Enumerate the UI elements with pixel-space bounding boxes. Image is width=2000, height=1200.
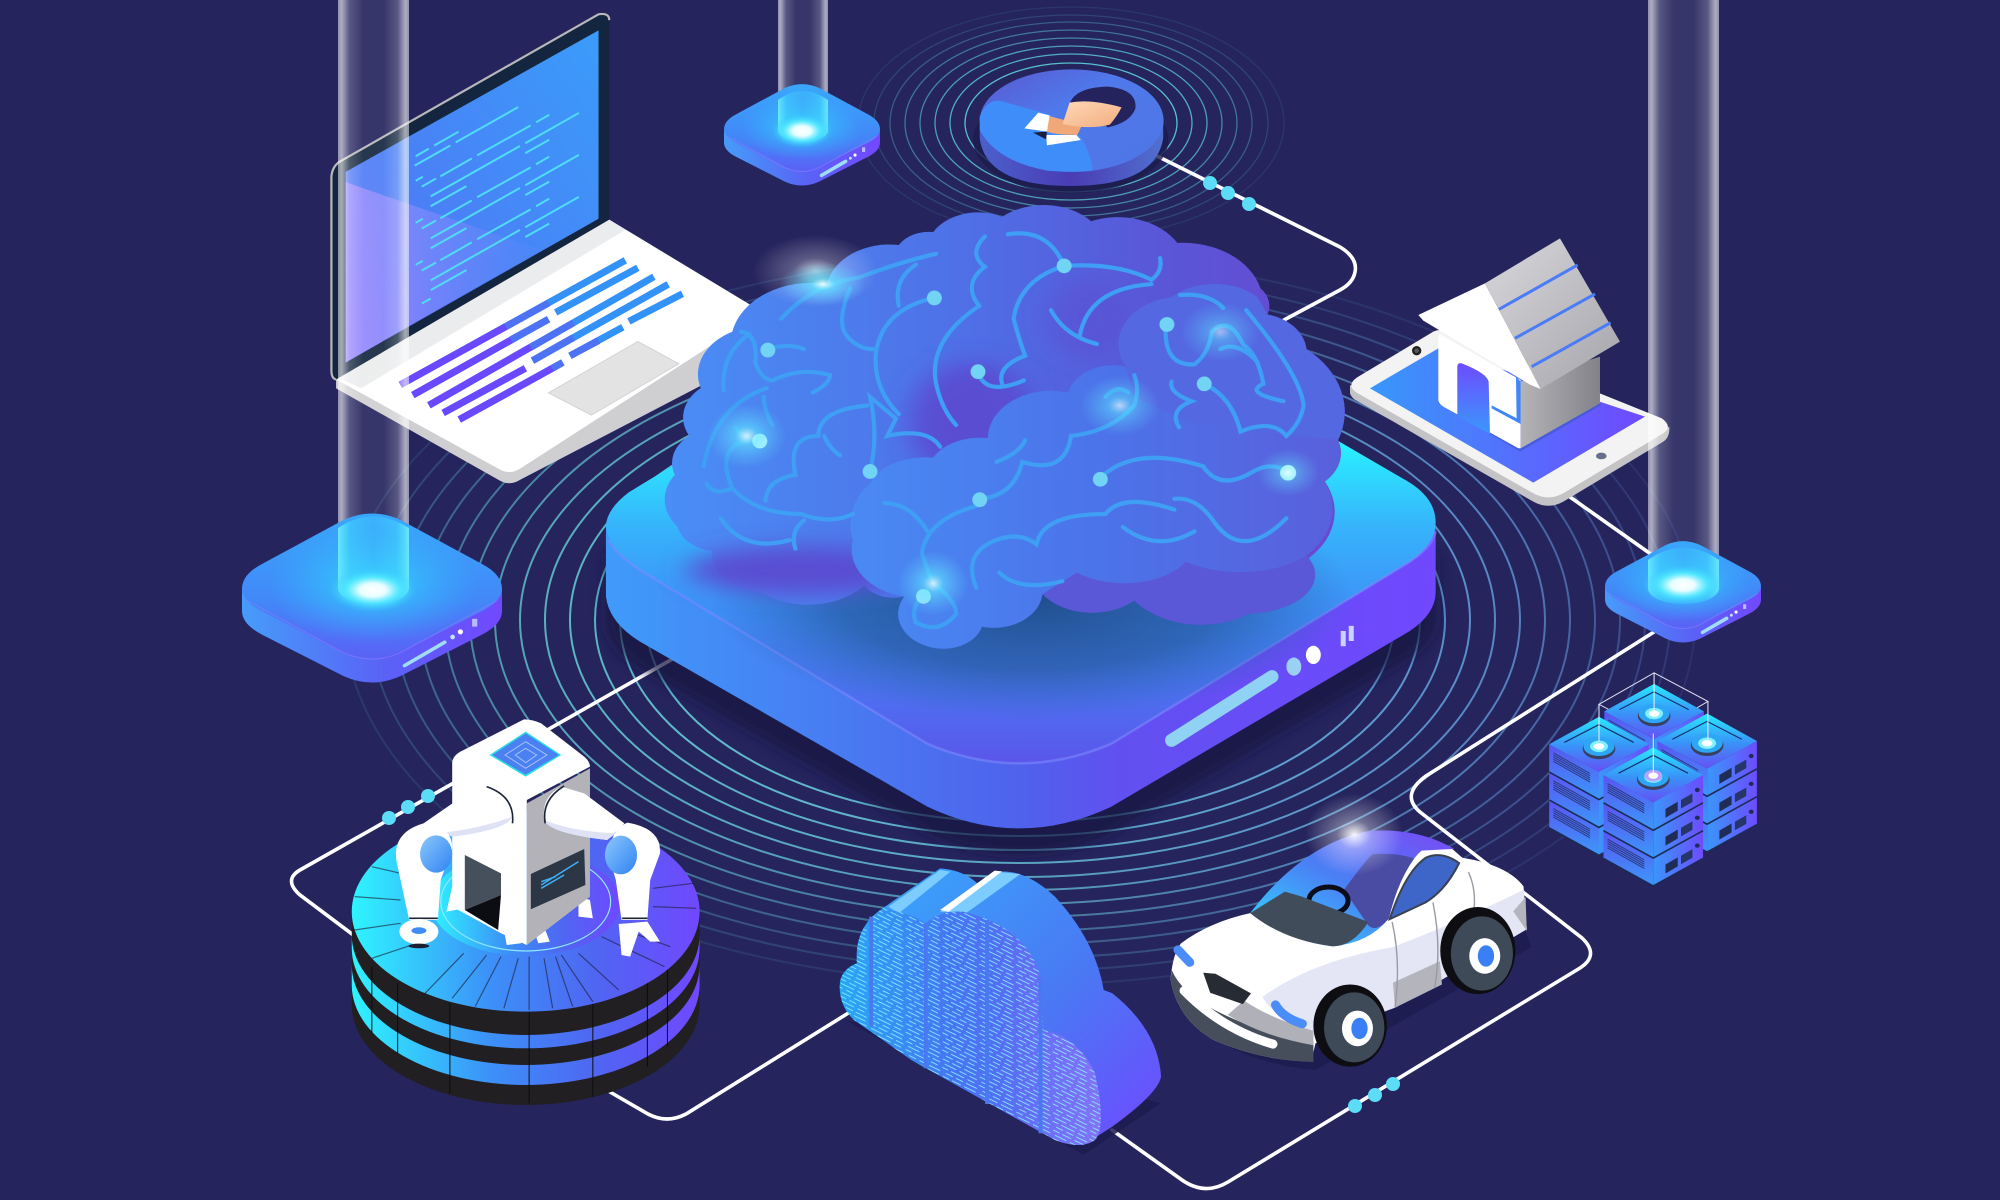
cloud front [840,908,1101,1145]
keyboard mid transition [506,303,599,368]
connector lines [292,154,1655,1189]
cloud shadow [845,1020,1161,1155]
robot on cylinder [352,719,700,1105]
connector dots [382,176,1400,1113]
left server stack [1549,717,1649,855]
car bumper chrome [1228,1001,1313,1045]
cloud lavender tint [926,911,1101,1145]
house right wall [1521,357,1600,448]
car sill [1393,897,1527,1008]
brain [665,205,1345,649]
car lower dark trim [1171,970,1313,1062]
rear wheel [1440,907,1515,994]
house shadow [1438,390,1602,452]
cloud column gaps [871,917,1041,1133]
person portrait [1024,87,1136,145]
central platform [606,269,1436,854]
trackpad [549,341,679,415]
robot right gripper [619,918,660,957]
person disc [973,69,1168,193]
platform top surface [606,269,1436,763]
steering wheel [1309,887,1348,914]
disc body [980,117,1163,186]
cloud data pattern [840,908,1101,1145]
robot left forearm [396,823,452,920]
status pill [1172,677,1272,740]
status bars [1343,626,1351,646]
brain contact shadow [709,475,1352,718]
cylinder base dark [352,912,700,1105]
cloud top glint [940,871,1002,912]
platform edge highlight [609,531,1436,763]
robot left panel [465,855,501,930]
robot left gripper [399,918,438,948]
headlights [1178,950,1302,1024]
laptop base side [336,312,756,483]
laptop screen [346,30,599,362]
screen code lines [415,107,579,304]
roof stripes [1499,265,1611,367]
cylinder blue stripe 2 [352,935,700,1048]
robot right screen [531,849,585,909]
tablet top [1351,330,1668,497]
car side window [1390,855,1459,919]
wire cube back [1599,673,1708,734]
brain cerebellum tint [1042,553,1315,625]
robot right elbow [605,836,637,874]
roof flare [1305,794,1403,876]
robot legs [446,887,593,945]
front wheel [1313,985,1387,1067]
brain purple shading [686,280,1128,594]
laptop lid frame [331,14,609,379]
laptop keyboard blue [400,260,682,420]
tablet screen [1370,348,1645,483]
brain light flares [706,234,1320,616]
platform side [606,527,1436,828]
car side panel [1262,890,1527,1036]
car grille [1203,973,1251,1004]
car interior [1344,854,1414,928]
laptop base top [336,220,758,472]
back server [1604,684,1704,767]
robot right joint line [545,786,564,823]
tablet home button [1596,453,1607,459]
screen reflection [346,182,541,362]
cloud [840,868,1161,1155]
robot left upper arm [424,787,512,837]
robot right upper arm [544,787,624,840]
tablet camera [1412,346,1421,355]
car shadow [1177,890,1532,1070]
robot left elbow [420,835,452,873]
car glass dome [1250,830,1454,946]
robot left arm shading [444,817,512,837]
beam and small platform top [724,0,880,186]
front server stack [1603,747,1703,886]
robot right forearm [611,823,660,920]
status lights [1286,646,1321,676]
brain folds [704,233,1304,627]
tablet with smart home [1350,238,1669,506]
cylinder blue stripe 1 [352,965,700,1085]
robot left joint line [487,787,513,823]
right server stack [1657,714,1757,852]
house door [1457,363,1490,434]
beam front left [242,0,502,682]
concentric signal rings around central platform [345,255,1695,985]
robot body right [527,768,590,945]
laptop hinge strip [338,220,625,388]
car door lines [1392,872,1474,1008]
platform ground shadow [606,553,1436,854]
brain parietal lobe [1118,284,1345,440]
keyboard purple keys [400,323,556,420]
car light bar [1184,991,1273,1044]
robot chest chip [490,732,561,777]
cloud top highlights [888,870,1020,913]
beam right and platform [1605,0,1761,642]
robot body left [452,719,590,945]
house window [1492,377,1521,424]
cylinder top [352,812,700,1012]
house left wall [1438,333,1521,448]
roof side [1485,238,1620,389]
cylinder seams [372,967,667,1103]
car body [1171,832,1527,1061]
disc top [980,69,1164,172]
center disc ring [441,852,611,951]
concentric signal rings around person disc [858,7,1284,239]
tablet side [1350,385,1669,506]
car [1171,794,1532,1070]
cylinder top radial lines [355,867,696,1010]
laptop [331,14,758,483]
robot right arm shading [544,820,616,840]
cloud extruded body [883,868,1161,1145]
wire cube lines [1599,673,1708,773]
server stacks [1549,673,1757,886]
cylinder center disc [431,851,620,956]
person suit [980,101,1092,172]
brain silhouette [665,205,1345,649]
brain nodes [752,258,1296,604]
laptop lid rim [331,14,609,379]
disc shadow [973,87,1168,193]
car windshield dark [1250,892,1368,946]
roof front [1418,283,1541,389]
brain temporal lobe [850,365,1341,649]
